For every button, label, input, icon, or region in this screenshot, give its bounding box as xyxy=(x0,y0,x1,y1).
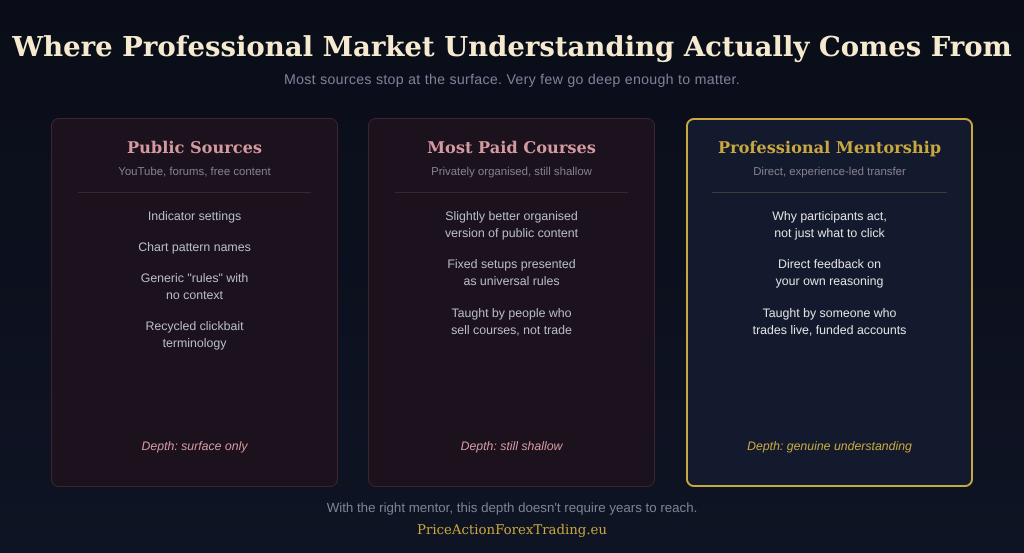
item: chart pattern names: Chart pattern names xyxy=(138,240,251,254)
item: better organised xyxy=(445,209,578,240)
website link: PriceActionForexTrading.eu xyxy=(417,523,607,538)
item: taught by live trader: trades live, funded accounts xyxy=(753,323,906,337)
item: taught by live trader xyxy=(752,306,906,337)
item: fixed setups: Fixed setups presented xyxy=(447,257,576,271)
item: better organised: Slightly better organised xyxy=(445,209,578,223)
heading: professional mentorship: Professional Mentorship xyxy=(718,138,941,157)
item: taught by sellers xyxy=(451,306,572,337)
item: clickbait terminology: Recycled clickbait xyxy=(145,319,244,333)
heading: public sources: Public Sources xyxy=(127,138,262,157)
item: why participants act: Why participants act, xyxy=(772,209,887,223)
closing note: With the right mentor, this depth doesn't require years to reach. xyxy=(327,500,697,515)
title: Where Professional Market Understanding Actually Comes From xyxy=(12,31,1012,63)
item: fixed setups xyxy=(447,257,576,288)
depth label: Depth: surface only xyxy=(142,439,247,453)
depth label: Depth: still shallow xyxy=(461,439,562,453)
item: generic rules: no context xyxy=(166,288,223,302)
item: why participants act: not just what to click xyxy=(774,226,885,240)
panel: professional mentorship xyxy=(686,118,973,487)
item: direct feedback: Direct feedback on xyxy=(778,257,881,271)
item: indicator settings: Indicator settings xyxy=(148,209,241,223)
item: why participants act xyxy=(772,209,887,240)
item: clickbait terminology xyxy=(145,319,244,350)
panel: most paid courses xyxy=(368,118,655,487)
subheading: Direct, experience-led transfer xyxy=(753,166,906,178)
item: taught by sellers: sell courses, not trade xyxy=(451,323,572,337)
subtitle: Most sources stop at the surface. Very few go deep enough to matter. xyxy=(284,72,740,88)
item: taught by sellers: Taught by people who xyxy=(451,306,572,320)
heading: most paid courses: Most Paid Courses xyxy=(427,138,596,157)
item: direct feedback: your own reasoning xyxy=(776,274,883,288)
item: generic rules: Generic "rules" with xyxy=(141,271,248,285)
subheading: YouTube, forums, free content xyxy=(118,166,271,178)
depth label: Depth: genuine understanding xyxy=(747,439,912,453)
panel: public sources xyxy=(51,118,338,487)
item: fixed setups: as universal rules xyxy=(463,274,560,288)
item: better organised: version of public content xyxy=(445,226,578,240)
item: taught by live trader: Taught by someone who xyxy=(763,306,896,320)
subheading: Privately organised, still shallow xyxy=(431,166,592,178)
item: generic rules xyxy=(141,271,248,302)
item: clickbait terminology: terminology xyxy=(163,336,226,350)
item: direct feedback xyxy=(776,257,883,288)
